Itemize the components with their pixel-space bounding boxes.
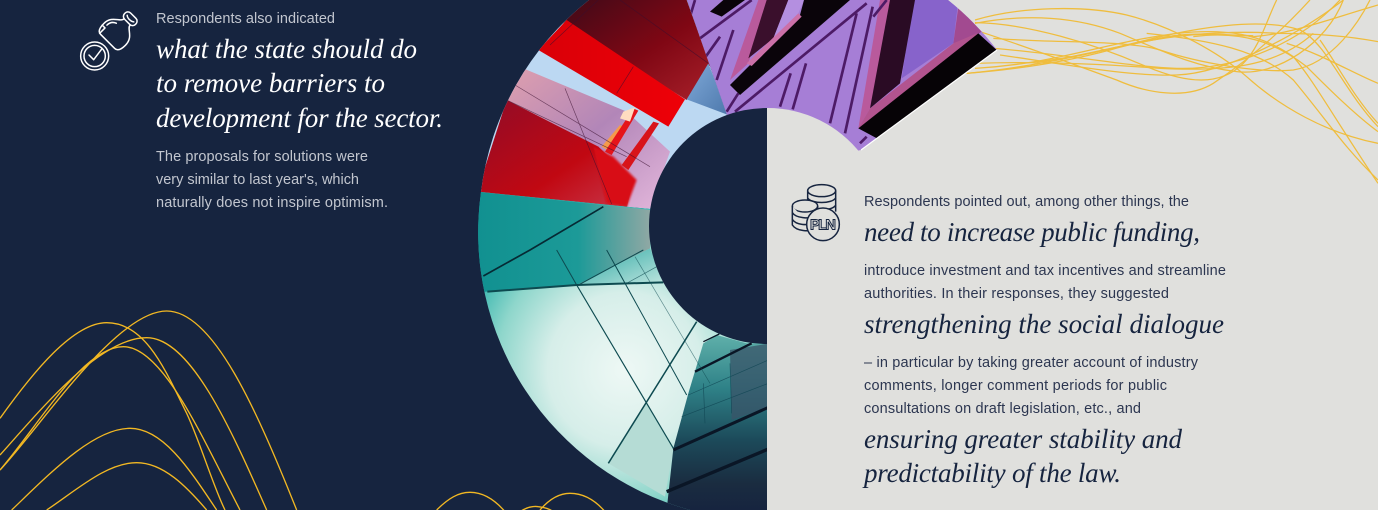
window panel (902, 0, 958, 78)
paragraph: consultations (864, 355, 1199, 417)
left heading: development for the sector. (156, 103, 443, 133)
photo segment: purple architecture (687, 0, 997, 150)
paragraph: incentives: authorities. In their responses, they suggested (864, 286, 1169, 302)
decorative gold lines: bottom left (0, 311, 297, 510)
dark red panel (563, 0, 710, 100)
black band middle (730, 0, 850, 95)
intro line: Respondents pointed out, among other things, the (864, 194, 1189, 210)
building grid (682, 360, 768, 423)
decorative gold lines: bottom centre (437, 492, 605, 510)
dark purple mullions (690, 0, 887, 143)
lilac building face (503, 68, 670, 208)
pink window edge (747, 13, 802, 66)
black band right (858, 33, 997, 140)
left heading: to remove barriers to (156, 68, 385, 98)
dark window right (870, 0, 915, 108)
left paragraph (156, 149, 388, 211)
left text block (156, 11, 443, 211)
pink ledge right (858, 33, 978, 128)
icon: coin stacks with PLN (792, 185, 839, 241)
lower red facade (477, 100, 633, 208)
left paragraph: The proposals for solutions were (156, 149, 368, 165)
black band top left (710, 0, 745, 17)
glass mullions (483, 207, 710, 463)
lower light pane (608, 403, 673, 497)
blue corner (687, 63, 728, 115)
bright red band (538, 20, 685, 127)
dark bands (667, 334, 770, 492)
pink hatching middle (730, 0, 768, 80)
darker right facade (730, 343, 770, 420)
icon: coin stacks with PLN: PLN (810, 218, 836, 234)
icon: bottle with check mark (81, 5, 144, 70)
highlight: public funding: need to increase public funding, (864, 217, 1200, 247)
dark window middle (748, 0, 788, 58)
donut centre: navy half (649, 108, 767, 344)
decorative gold lines: top right (967, 0, 1378, 183)
red glow (593, 147, 637, 207)
white edge of purple segment (861, 50, 997, 150)
dark building (667, 335, 770, 510)
left paragraph: naturally does not inspire optimism. (156, 195, 388, 211)
panel: navy background (0, 0, 767, 510)
paragraph: consultations: comments, longer comment periods for public (864, 378, 1167, 394)
upper teal glass (478, 192, 650, 292)
left heading (156, 34, 443, 133)
left paragraph: very similar to last year's, which (156, 172, 359, 188)
highlight: stability: predictability of the law. (862, 458, 1121, 488)
intro line: Respondents also indicated (156, 11, 335, 27)
lilac wall (687, 0, 997, 150)
paragraph: consultations: consultations on draft legislation, etc., and (864, 401, 1141, 417)
photo segment: red architecture (481, 0, 727, 209)
left heading: what the state should do (156, 34, 417, 64)
teal glass base (478, 192, 758, 510)
middle light teal pane (577, 248, 663, 285)
pink hatching right (858, 0, 893, 128)
red columns (602, 107, 659, 170)
facade lines (507, 0, 708, 204)
donut centre: grey half (767, 108, 861, 344)
panel: light grey background (767, 0, 1378, 510)
paragraph: incentives (864, 263, 1226, 302)
highlight: stability: ensuring greater stability and (864, 424, 1182, 454)
highlight: stability (862, 424, 1182, 488)
highlight: social dialogue: strengthening the social dialogue (864, 309, 1224, 339)
photo segment: teal architecture (478, 192, 767, 510)
purple pane between windows (773, 0, 804, 38)
paragraph: consultations: – in particular by taking greater account of industry (864, 355, 1199, 371)
paragraph: incentives: introduce investment and tax incentives and streamline (864, 263, 1226, 279)
sky background (481, 0, 727, 209)
right text block (862, 194, 1226, 488)
